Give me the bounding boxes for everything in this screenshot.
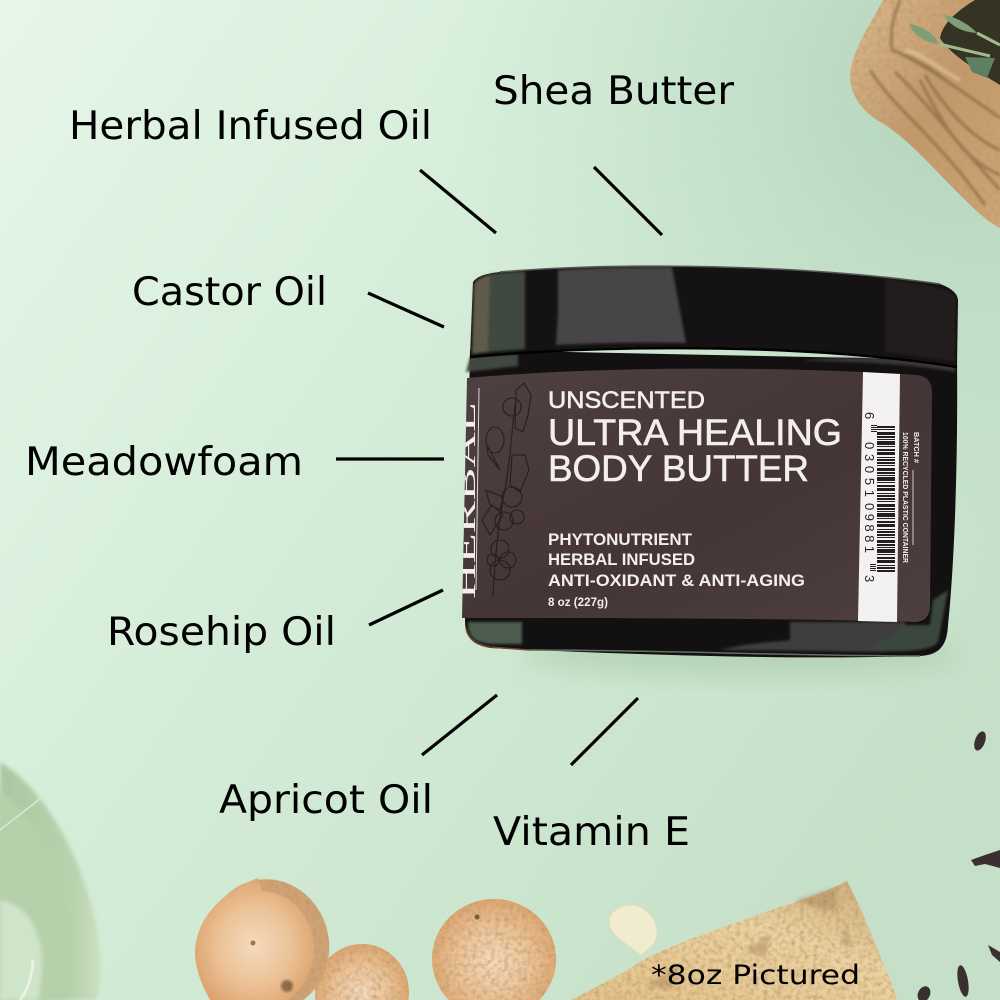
pointer lines (336, 167, 662, 765)
brand vertical text (462, 388, 480, 598)
shell seed (609, 905, 657, 955)
ingredient labels (25, 69, 735, 855)
barcode digits (862, 412, 877, 582)
side text: 100% RECYCLED PLASTIC CONTAINER (901, 432, 908, 563)
scattered dark seeds (915, 730, 1000, 1000)
ingredient labels: Castor Oil (132, 270, 327, 315)
label headline: ULTRA HEALING (548, 412, 842, 453)
label details (548, 530, 805, 609)
glass bowl (0, 762, 100, 1000)
side text: BATCH # (912, 432, 919, 463)
label details: HERBAL INFUSED (548, 550, 695, 569)
ingredient labels: Rosehip Oil (107, 610, 336, 655)
botanical line drawing (482, 383, 531, 597)
label headline (548, 387, 842, 489)
woven basket with herbs (850, 0, 1000, 228)
barcode digits: 03051 (862, 442, 877, 497)
barcode panel (858, 372, 900, 622)
jar (454, 266, 958, 657)
ingredient labels: Herbal Infused Oil (69, 104, 432, 149)
root wedge (571, 881, 897, 1000)
label details: 8 oz (227g) (548, 597, 608, 609)
label headline: UNSCENTED (548, 387, 705, 414)
brand vertical text: HERBAL (454, 402, 481, 599)
ingredient labels: Meadowfoam (25, 440, 303, 485)
jar lid (470, 266, 958, 366)
barcode digits: 09881 (862, 503, 877, 553)
label headline: BODY BUTTER (548, 448, 809, 489)
label details: PHYTONUTRIENT (548, 530, 693, 549)
footnote: *8oz Pictured (651, 960, 860, 991)
ingredient labels: Shea Butter (493, 69, 735, 114)
sliced roots (195, 868, 897, 1000)
label details: ANTI-OXIDANT & ANTI-AGING (548, 571, 805, 590)
barcode digits: 6 (862, 412, 877, 419)
product label (462, 369, 932, 622)
jar body (465, 350, 957, 657)
ingredient labels: Vitamin E (493, 810, 690, 855)
ingredient labels: Apricot Oil (219, 778, 433, 823)
barcode digits: 3 (862, 575, 877, 582)
barcode bars (873, 425, 886, 572)
side text (901, 432, 919, 563)
